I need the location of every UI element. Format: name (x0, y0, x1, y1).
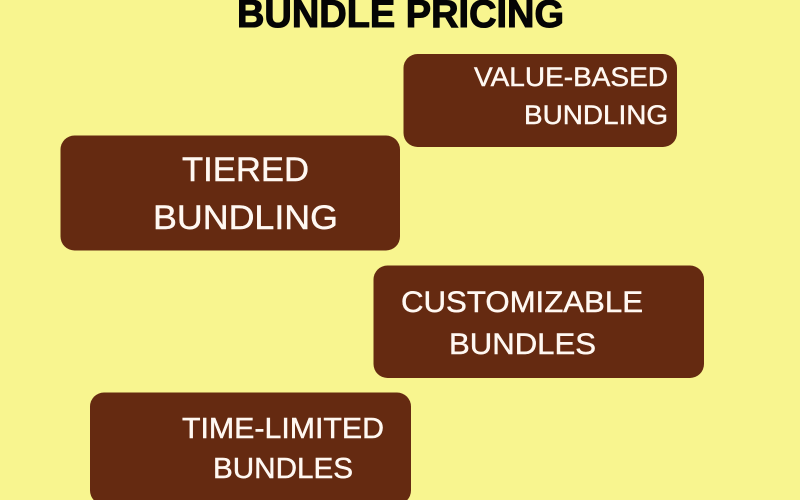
panel: tiered bundling (60, 136, 400, 250)
label: tiered bundling: BUNDLING (153, 199, 338, 237)
panel: time-limited bundles (90, 392, 411, 500)
label: value-based bundling (474, 62, 668, 130)
panel: value-based bundling (404, 54, 677, 147)
label: time-limited bundles: BUNDLES (213, 453, 353, 485)
label: time-limited bundles (182, 413, 384, 485)
label: tiered bundling (153, 151, 338, 237)
label: tiered bundling: TIERED (182, 151, 309, 189)
label: customizable bundles: BUNDLES (449, 328, 596, 361)
panel: customizable bundles (374, 266, 704, 378)
label: customizable bundles (401, 286, 643, 361)
label: value-based bundling: VALUE-BASED (474, 62, 668, 92)
label: value-based bundling: BUNDLING (524, 100, 668, 130)
label: time-limited bundles: TIME-LIMITED (182, 413, 384, 445)
label: customizable bundles: CUSTOMIZABLE (401, 286, 643, 319)
